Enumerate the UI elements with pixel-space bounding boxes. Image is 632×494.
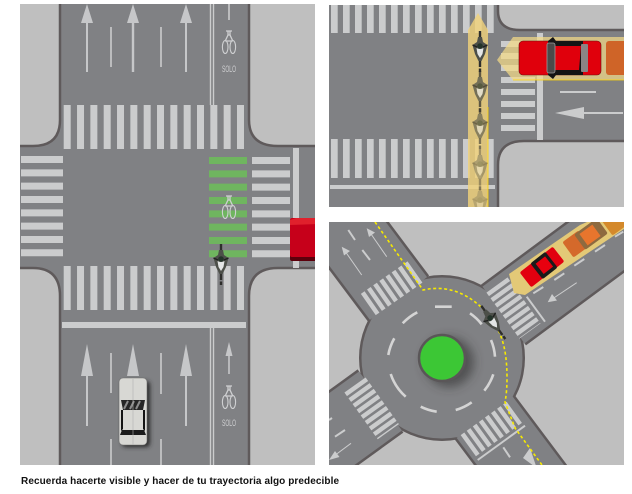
- stop line: right approach: [293, 148, 299, 268]
- panel: main intersection: [10, 0, 325, 475]
- cyclist path: [375, 222, 542, 465]
- NW crosswalk: [368, 272, 415, 304]
- island shadow: [424, 337, 474, 387]
- central island: [419, 335, 465, 381]
- stop line: bottom approach: [62, 322, 246, 328]
- zone edge: [488, 80, 624, 207]
- ring dashes: [388, 307, 495, 412]
- kerbs of roads and ring: [300, 178, 632, 494]
- panel: overtaking cyclists: [329, 5, 624, 207]
- road arrow heads: [329, 228, 557, 468]
- road surface: [329, 5, 624, 207]
- lane lines: [111, 4, 229, 465]
- bottom crosswalk: [331, 139, 494, 178]
- orange cars: [562, 208, 629, 258]
- SE crosswalk: [468, 412, 514, 446]
- SOLO label top: SOLO: [222, 64, 236, 74]
- red car side view: [290, 218, 315, 261]
- sidewalk corners: [496, 5, 624, 207]
- cyclist: [475, 301, 511, 343]
- bottom lane arrows: [81, 342, 232, 426]
- road markings: [329, 230, 623, 460]
- top crosswalk: [64, 105, 245, 149]
- lane arrow: [555, 107, 623, 119]
- sidewalk background: [329, 222, 624, 465]
- bike lane symbol top: [222, 31, 236, 54]
- car awareness zone: [509, 222, 624, 295]
- panel: roundabout: [329, 222, 624, 465]
- SW crosswalk: [355, 385, 388, 432]
- right crosswalk: [252, 157, 290, 258]
- bottom crosswalk: [64, 266, 245, 310]
- NE crosswalk: [497, 285, 530, 331]
- green bike crossing: [209, 157, 247, 258]
- road surfaces and ring: [300, 178, 632, 494]
- cyclists sequence: [472, 31, 488, 226]
- bike symbol on green crossing: [222, 196, 236, 218]
- bike lane dividers: [210, 4, 214, 465]
- cyclist: [214, 244, 228, 285]
- left crosswalk: [21, 156, 63, 257]
- orange car: [606, 41, 624, 75]
- top crosswalk: [331, 5, 494, 33]
- lane line: [560, 91, 596, 93]
- stop line vertical: [537, 33, 543, 140]
- top lane arrows: [81, 4, 192, 72]
- cyclist awareness zone: [468, 13, 488, 207]
- red car: [519, 246, 565, 288]
- road surface: [20, 4, 315, 465]
- stop line: [330, 185, 495, 189]
- sidewalk corners: [10, 0, 325, 475]
- bike lane symbol bottom: [222, 386, 236, 408]
- white car: [119, 378, 150, 447]
- red car: [519, 37, 601, 79]
- right crosswalk: [501, 44, 535, 128]
- caption: Recuerda hacerte visible y hacer de tu trayectoria algo predecible: [21, 476, 339, 487]
- car awareness zone: [497, 37, 624, 80]
- SOLO label bottom: SOLO: [222, 418, 236, 428]
